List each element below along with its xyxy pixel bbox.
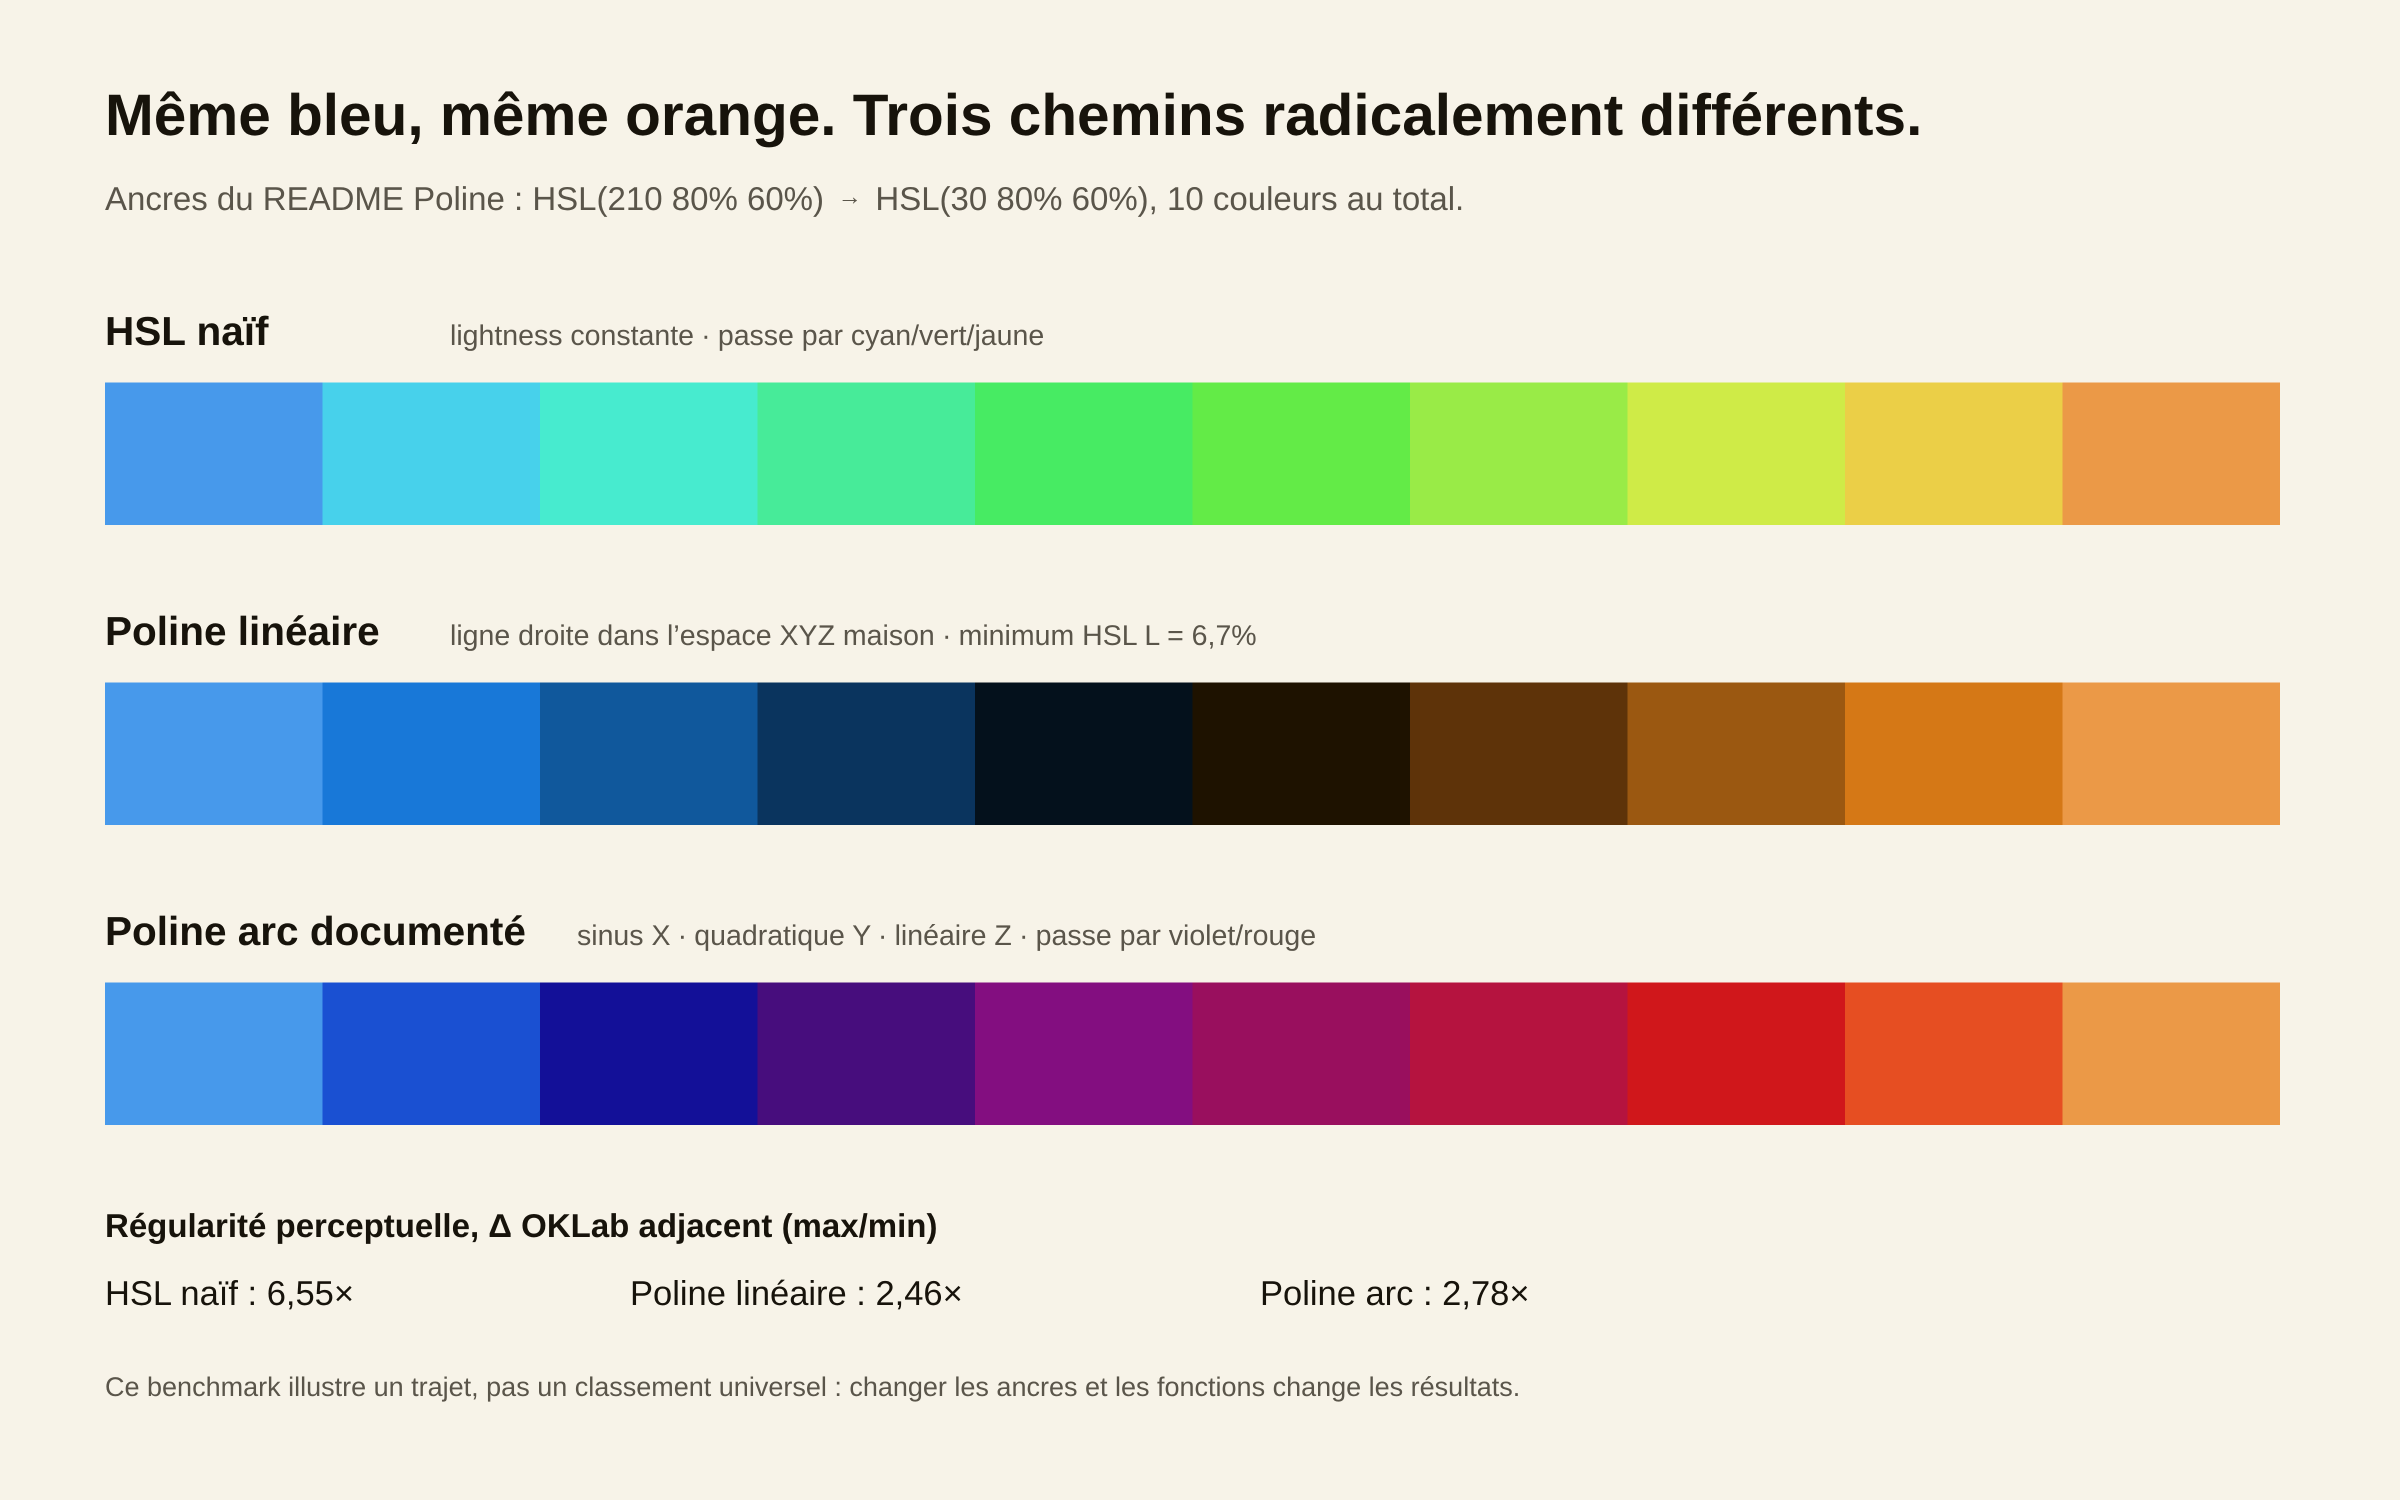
subtitle: → xyxy=(838,184,862,211)
panel: Poline arc documenté xyxy=(105,908,2280,1125)
subtitle: HSL(30 80% 60%), 10 couleurs au total. xyxy=(866,180,1464,217)
title: Même bleu, même orange. Trois chemins radicalement différents. xyxy=(105,83,1922,148)
color strip: Poline linéaire xyxy=(105,682,2280,825)
footnote: Ce benchmark illustre un trajet, pas un classement universel : changer les ancres et les fonctions change les résultats. xyxy=(105,1372,1520,1402)
stat: Poline linéaire: Poline linéaire : 2,46× xyxy=(630,1275,963,1313)
color strip: Poline arc documenté xyxy=(105,982,2280,1125)
description: Poline arc documenté: sinus X · quadratique Y · linéaire Z · passe par violet/rouge xyxy=(577,920,1316,952)
panel: Poline linéaire xyxy=(105,608,2280,825)
panel: HSL naïf xyxy=(105,308,2280,525)
heading: Poline linéaire: Poline linéaire xyxy=(105,608,380,654)
subtitle: Ancres du README Poline : HSL(210 80% 60%) xyxy=(105,180,824,217)
heading: HSL naïf: HSL naïf xyxy=(105,308,269,354)
color strip: HSL naïf xyxy=(105,382,2280,525)
description: HSL naïf: lightness constante · passe par cyan/vert/jaune xyxy=(450,320,1044,352)
heading: Poline arc documenté: Poline arc documenté xyxy=(105,908,526,954)
description: Poline linéaire: ligne droite dans l’espace XYZ maison · minimum HSL L = 6,7% xyxy=(450,620,1257,652)
stat: Poline arc: Poline arc : 2,78× xyxy=(1260,1275,1529,1313)
stat: HSL naïf: HSL naïf : 6,55× xyxy=(105,1275,354,1313)
stats heading: Régularité perceptuelle, Δ OKLab adjacent (max/min) xyxy=(105,1207,937,1244)
